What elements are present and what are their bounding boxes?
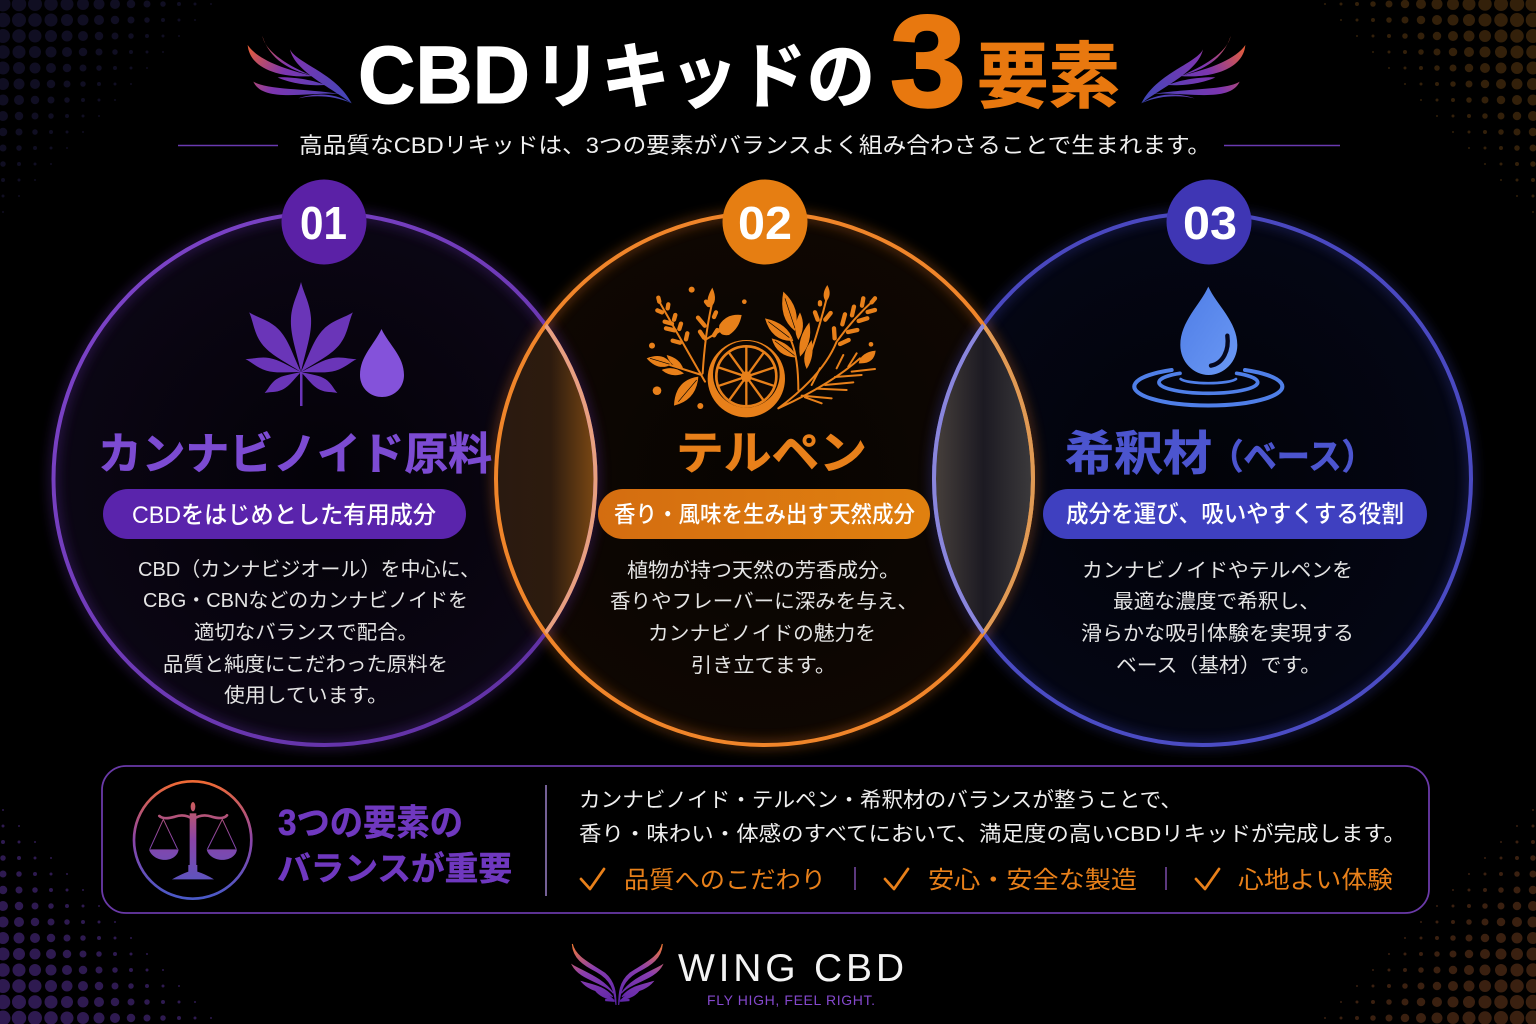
pill: base (1043, 489, 1427, 539)
badge 01: 01 (300, 197, 347, 249)
pill: cannabinoid (103, 489, 466, 539)
balance description: カンナビノイド・テルペン・希釈材のバランスが整うことで、 (579, 789, 1182, 812)
checklist: 品質へのこだわり (624, 867, 826, 894)
body: terpene: カンナビノイドの魅力を (648, 622, 876, 645)
badge 03: 03 (1183, 197, 1237, 249)
icon: cannabis leaf and drop (241, 282, 404, 406)
body: cannabinoid: CBG・CBNなどのカンナビノイドを (143, 589, 468, 612)
title wing left (248, 36, 352, 103)
balance heading (277, 802, 512, 887)
title wing right (1141, 36, 1245, 103)
pill: terpene: 香り・風味を生み出す天然成分 (614, 501, 915, 527)
title: 要素 (977, 38, 1120, 118)
footer logo: WING CBD (678, 947, 904, 990)
title: リキッドの (533, 38, 875, 118)
body: base: 最適な濃度で希釈し、 (1113, 590, 1320, 613)
body: terpene (610, 559, 918, 677)
body: terpene: 植物が持つ天然の芳香成分。 (627, 559, 900, 582)
icon: balance scale (134, 781, 251, 899)
body: cannabinoid: 適切なバランスで配合。 (194, 621, 418, 644)
heading: terpene: テルペン (676, 427, 867, 479)
body: cannabinoid: 品質と純度にこだわった原料を (163, 653, 448, 676)
body: terpene: 引き立てます。 (691, 654, 836, 677)
body: cannabinoid: 使用しています。 (224, 684, 388, 707)
checklist (581, 867, 1393, 894)
title: CBD (358, 30, 530, 121)
balance heading: バランスが重要 (277, 850, 512, 887)
heading: base: （ベース） (1210, 438, 1375, 477)
badge 02: 02 (738, 197, 792, 249)
panel: cannabinoid (98, 180, 492, 707)
body: cannabinoid: CBD（カンナビジオール）を中心に、 (138, 558, 480, 581)
panel: balance (102, 766, 1429, 913)
badge 03 (1166, 180, 1252, 264)
body: base: ベース（基材）です。 (1116, 654, 1321, 677)
pill: base: 成分を運び、吸いやすくする役割 (1066, 501, 1404, 528)
pill: cannabinoid: CBDをはじめとした有用成分 (132, 502, 436, 529)
footer logo: FLY HIGH, FEEL RIGHT. (707, 992, 875, 1008)
panel: base (1043, 180, 1427, 677)
pill: terpene (598, 489, 930, 539)
checklist: 心地よい体験 (1238, 867, 1393, 894)
badge 02 (722, 180, 808, 264)
title (248, 0, 1245, 134)
body: base: カンナビノイドやテルペンを (1082, 559, 1353, 582)
balance description (579, 789, 1406, 846)
icon: botanical and citrus (647, 285, 876, 417)
venn circles (54, 213, 1471, 745)
panel: terpene (598, 180, 930, 677)
body: base: 滑らかな吸引体験を実現する (1081, 622, 1354, 645)
body: base (1081, 559, 1354, 677)
checklist: 安心・安全な製造 (928, 867, 1137, 894)
balance heading: 3つの要素の (278, 802, 463, 843)
heading: base: 希釈材 (1065, 427, 1212, 480)
body: cannabinoid (138, 558, 480, 707)
icon: wing logo (572, 944, 662, 1005)
heading: base (1065, 427, 1375, 480)
icon: water drop with ripples (1134, 287, 1282, 405)
badge 01 (282, 180, 366, 264)
footer logo (572, 944, 904, 1008)
heading: cannabinoid: カンナビノイド原料 (98, 430, 492, 479)
subtitle: 高品質なCBDリキッドは、3つの要素がバランスよく組み合わさることで生まれます。 (299, 133, 1211, 158)
body: terpene: 香りやフレーバーに深みを与え、 (610, 590, 918, 613)
balance description: 香り・味わい・体感のすべてにおいて、満足度の高いCBDリキッドが完成します。 (579, 823, 1406, 846)
